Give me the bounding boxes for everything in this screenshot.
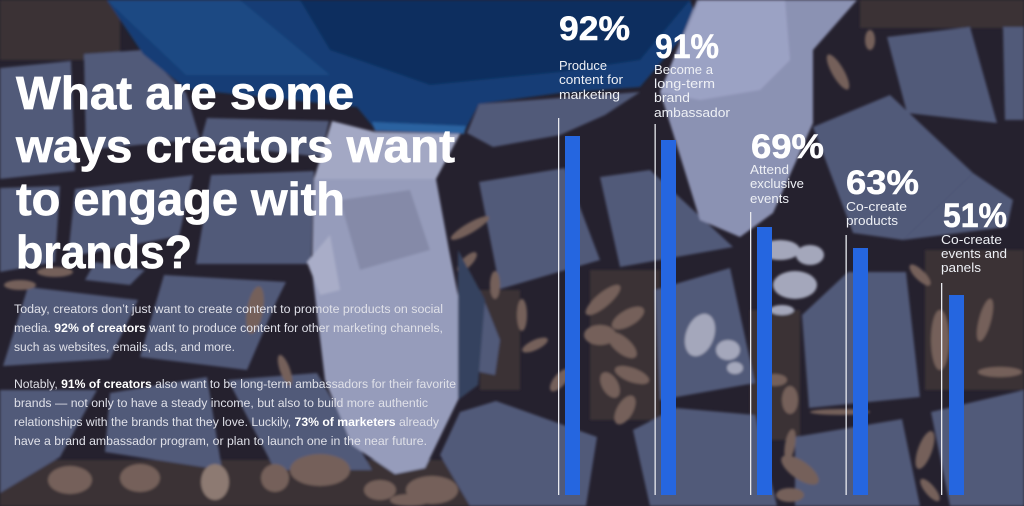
text block: intro paragraph: such as websites, emails, ads, and more. [14,340,235,354]
bar: 51% co-create events and panels: events and [941,247,1007,261]
bar: 91% become a long-term brand ambassador [654,28,730,495]
bar: 69% attend exclusive events: 69% [751,128,824,166]
bar: 51% co-create events and panels: panels [941,261,981,275]
title: What are some [16,67,354,119]
text block: ambassador paragraph [14,377,456,448]
bar: 69% attend exclusive events: Attend [750,163,789,177]
bar: 51% co-create events and panels [941,197,1007,495]
bar: 92% produce content for marketing [558,10,630,495]
title: ways creators want [15,120,455,172]
text block: ambassador paragraph: have a brand ambassador program, or plan to launch one in the near future. [14,434,427,448]
title [15,67,455,278]
bar: 51% co-create events and panels: 51% [943,197,1007,235]
bar: 92% produce content for marketing: 92% [559,10,630,48]
bar: 69% attend exclusive events: exclusive [750,177,804,191]
text block: intro paragraph [14,302,443,354]
left sneaker [314,121,460,179]
bar: 91% become a long-term brand ambassador: brand [654,91,690,105]
text block: ambassador paragraph: brands — not only to have a steady income, but also to build more authentic [14,396,428,410]
bar: 91% become a long-term brand ambassador: 91% [655,28,719,66]
bar: 92% produce content for marketing: marketing [559,88,620,102]
light debris on stone [679,240,824,374]
text block: intro paragraph: media. 92% of creators want to produce content for other marketing channels, [14,321,443,335]
text block: ambassador paragraph: relationships with the brands that they love. Luckily, 73% of marketers already [14,415,440,429]
bar: 63% co-create products: products [846,214,898,228]
title: to engage with [16,173,345,225]
bar: 92% produce content for marketing: content for [559,73,623,87]
bar: 91% become a long-term brand ambassador: ambassador [654,106,730,120]
title: brands? [16,226,192,278]
bar: 69% attend exclusive events [750,128,824,495]
bar: 63% co-create products [846,164,919,495]
bar: 91% become a long-term brand ambassador: Become a [654,63,713,77]
bar: 91% become a long-term brand ambassador: long-term [654,77,715,91]
bar: 92% produce content for marketing: Produce [559,59,607,73]
bar chart: ways creators want to engage [558,10,1007,495]
bar: 63% co-create products: 63% [846,164,919,202]
right sneaker [660,0,857,237]
text block: intro paragraph: Today, creators don’t just want to create content to promote products on social [14,302,443,316]
text block: ambassador paragraph: Notably, 91% of creators also want to be long-term ambassadors for their favorite [14,377,456,391]
jeans [107,0,697,132]
bar: 63% co-create products: Co-create [846,200,907,214]
bar: 51% co-create events and panels: Co-create [941,233,1002,247]
bar: 69% attend exclusive events: events [750,192,789,206]
